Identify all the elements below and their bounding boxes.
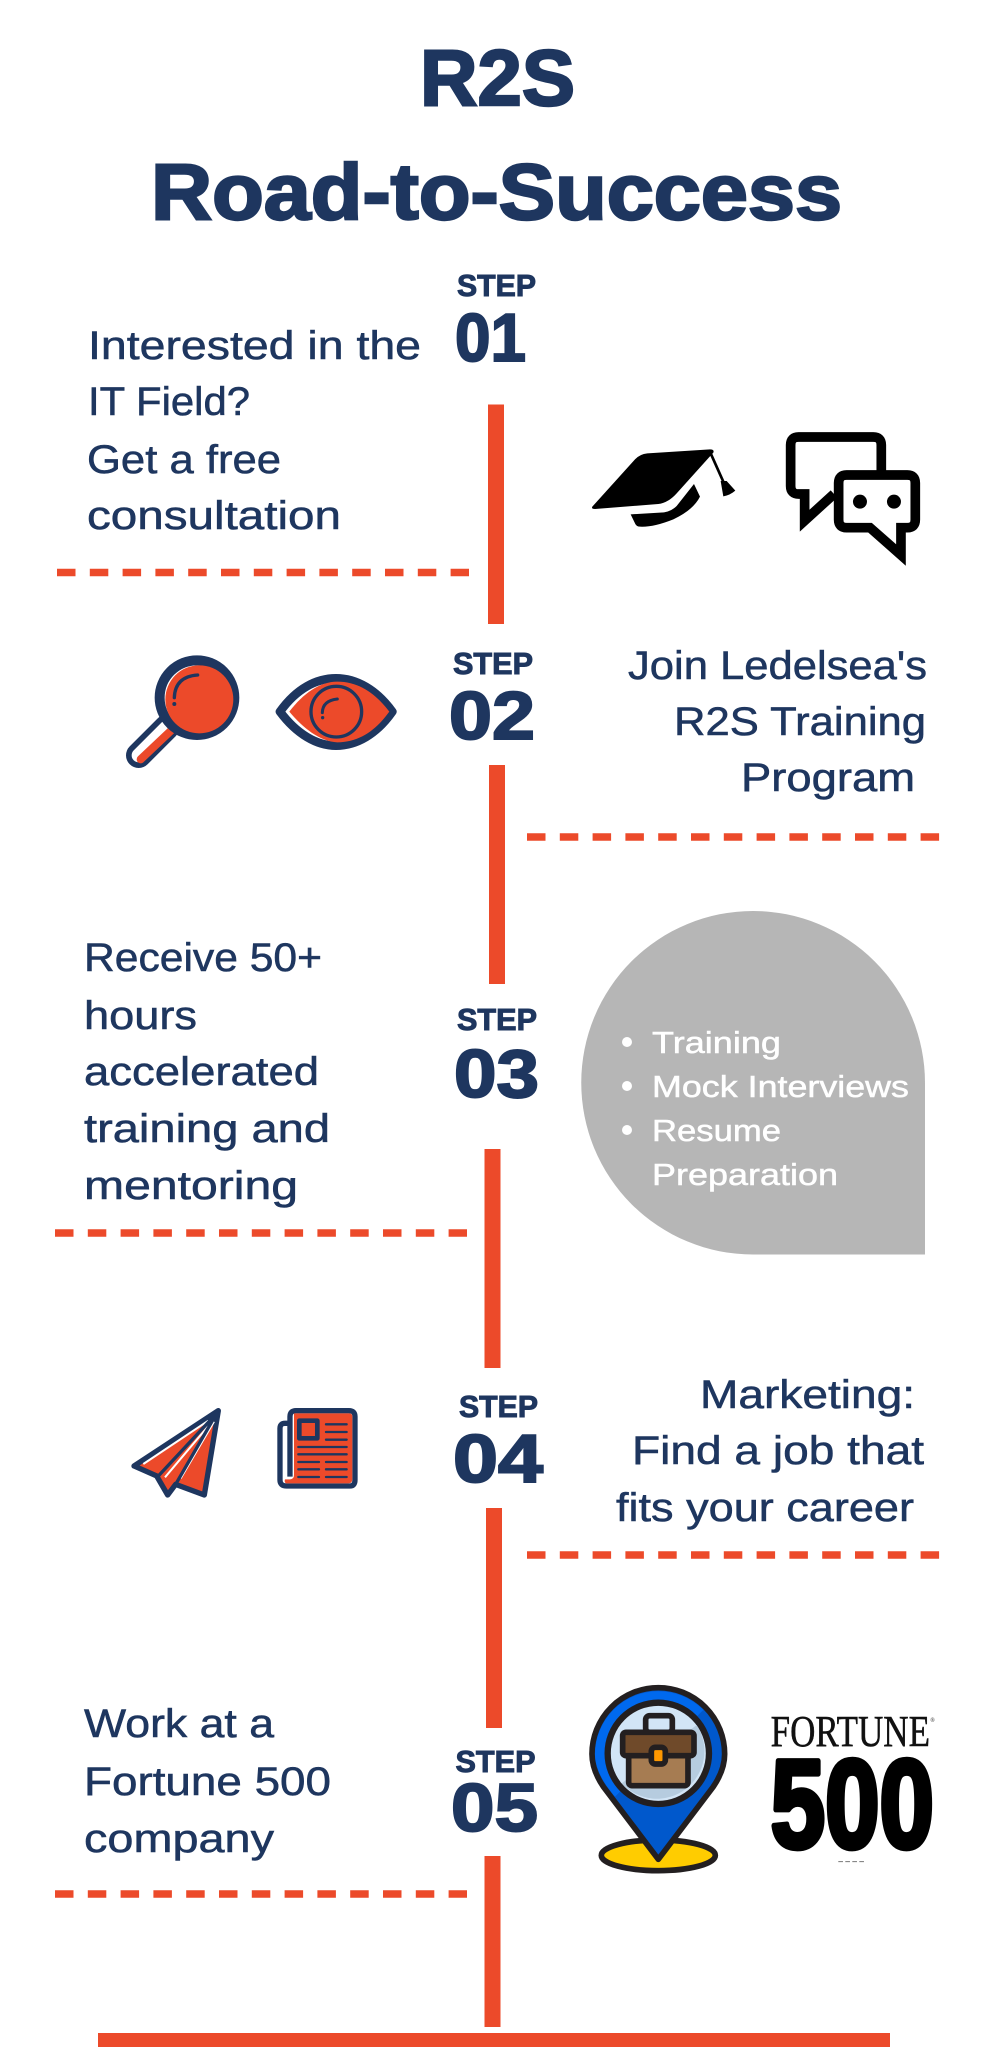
step 02 text: R2S Training <box>674 700 926 744</box>
panel: step 04 <box>134 1373 940 1555</box>
step 03 text <box>84 936 330 1208</box>
timeline connector 4 <box>486 1508 502 1728</box>
step 05 text: company <box>84 1817 274 1861</box>
title <box>151 33 842 236</box>
icon: location pin with briefcase <box>592 1688 725 1871</box>
step 05 badge: 05 <box>451 1770 538 1846</box>
timeline connector 3 <box>484 1149 500 1368</box>
panel: step 03 <box>55 911 925 1254</box>
panel: step 01 <box>57 268 915 572</box>
step 03 text: Receive 50+ <box>84 936 322 980</box>
panel: step 02 <box>139 644 940 837</box>
step 05 text: Work at a <box>84 1702 275 1746</box>
step 03 badge: 03 <box>454 1036 539 1112</box>
step 01 badge: STEP <box>457 268 536 303</box>
step 05 text: Fortune 500 <box>84 1760 331 1804</box>
step 01 text: Get a free <box>87 438 281 482</box>
step 03 text: mentoring <box>84 1164 298 1208</box>
icon: eye <box>280 678 392 746</box>
step 01 text: IT Field? <box>88 380 250 424</box>
step 03 badge <box>454 1002 539 1112</box>
title: R2S <box>420 33 575 122</box>
callout: training list: Preparation <box>652 1157 838 1192</box>
icon: graduation cap <box>592 449 735 527</box>
step 02 text <box>628 644 927 800</box>
title: Road-to-Success <box>151 147 842 236</box>
icon: paper plane <box>134 1411 218 1495</box>
step 04 badge <box>453 1389 543 1497</box>
step 04 text: fits your career <box>616 1486 914 1530</box>
step 04 text <box>616 1373 924 1530</box>
logo: Fortune 500: 500 <box>771 1736 934 1875</box>
callout: training list <box>581 911 925 1254</box>
step 01 text: consultation <box>87 494 341 538</box>
callout: training list: Resume <box>652 1113 781 1148</box>
step 02 text: Join Ledelsea's <box>628 644 927 688</box>
step 05 badge: STEP <box>456 1744 536 1779</box>
logo: Fortune 500: ® <box>930 1717 935 1724</box>
callout: training list: Training <box>652 1025 781 1060</box>
step 01 text <box>87 324 421 538</box>
callout: training list: Mock Interviews <box>652 1069 909 1104</box>
step 05 badge <box>451 1744 538 1846</box>
logo: Fortune 500: FORTUNE <box>771 1707 930 1756</box>
timeline connector 2 <box>489 765 505 984</box>
step 04 text: Marketing: <box>700 1373 915 1417</box>
step 04 badge: 04 <box>453 1421 543 1497</box>
step 03 text: hours <box>84 994 197 1038</box>
step 03 badge: STEP <box>457 1002 537 1037</box>
icon: chat bubbles <box>791 437 915 555</box>
step 02 text: Program <box>741 756 915 800</box>
logo: Fortune 500 <box>771 1707 935 1875</box>
icon: magnifying glass <box>139 660 234 759</box>
step 03 text: training and <box>84 1107 330 1151</box>
step 04 text: Find a job that <box>632 1429 924 1473</box>
step 02 badge <box>449 646 535 754</box>
step 01 badge: 01 <box>455 300 526 376</box>
step 01 badge <box>455 268 536 376</box>
timeline connector 5 <box>484 1856 500 2027</box>
timeline base bar <box>98 2033 890 2047</box>
step 05 text <box>84 1702 331 1861</box>
step 02 badge: 02 <box>449 678 535 754</box>
step 02 badge: STEP <box>453 646 533 681</box>
step 04 badge: STEP <box>459 1389 538 1424</box>
panel: step 05 <box>55 1688 935 1894</box>
step 03 text: accelerated <box>84 1050 319 1094</box>
timeline connector 1 <box>488 404 504 624</box>
icon: newspaper <box>280 1411 355 1486</box>
step 01 text: Interested in the <box>88 324 421 368</box>
